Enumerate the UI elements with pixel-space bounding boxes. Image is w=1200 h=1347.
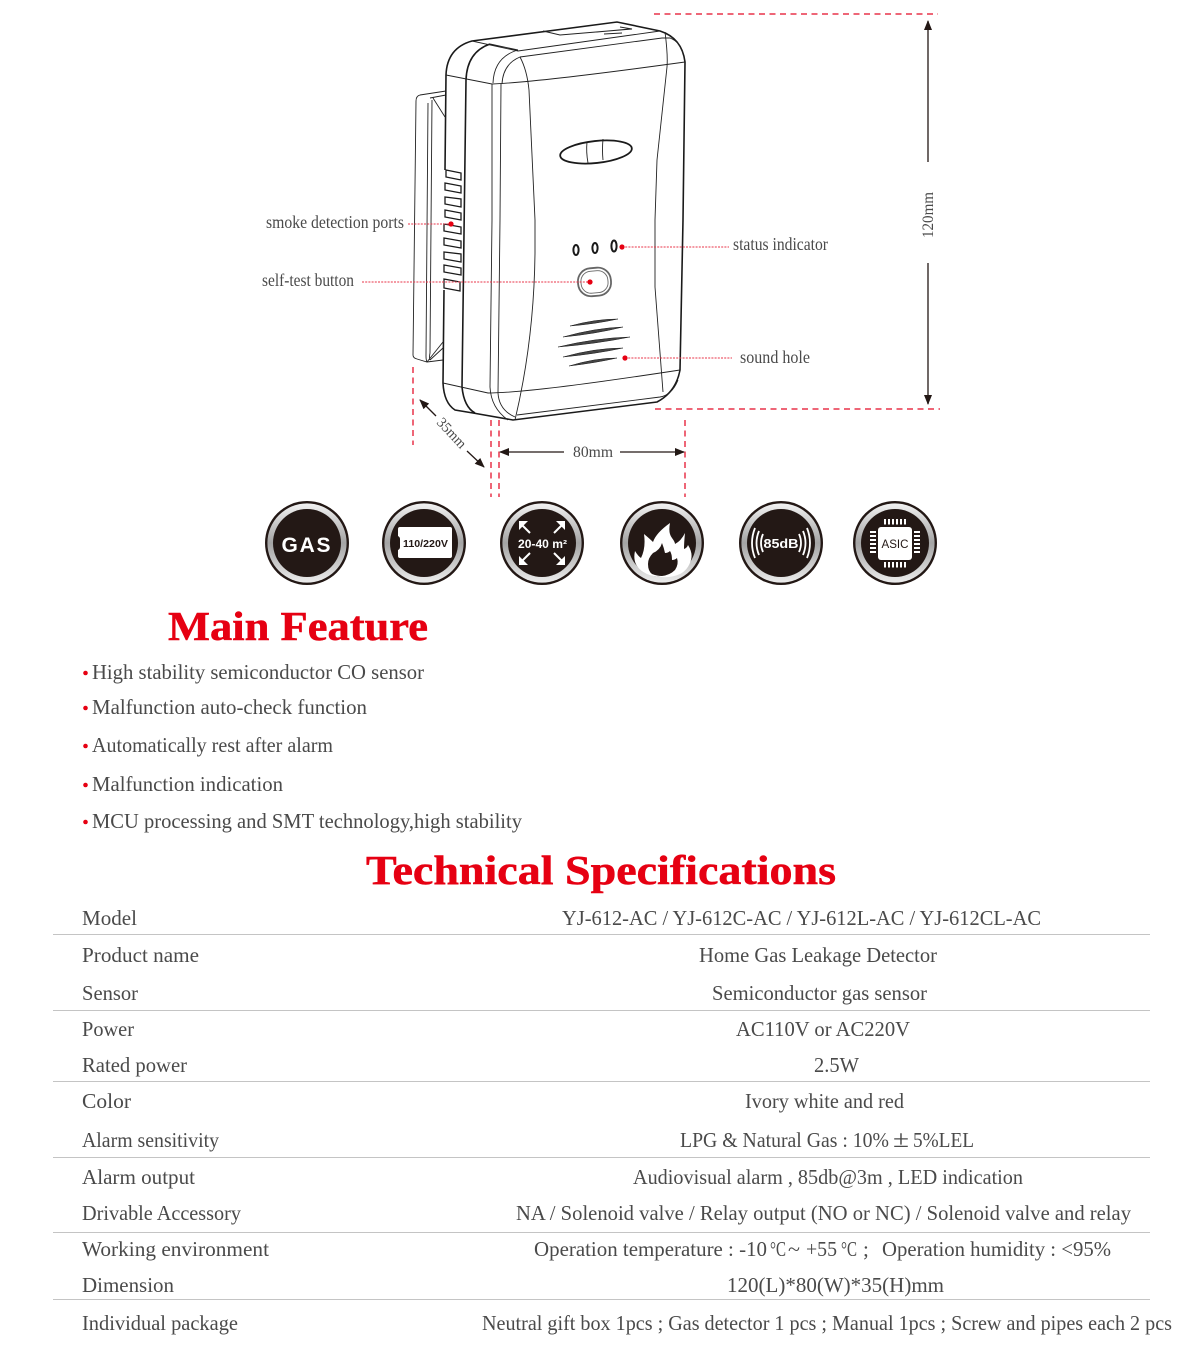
row: Product name: Product name [82,943,199,967]
icon: GAS [265,501,349,585]
row: Working environment: Operation temperature : -10 [534,1237,767,1261]
heading: Technical Specifications: Technical Specifications [366,847,836,893]
icon: 85dB alarm [739,501,823,585]
row: Drivable Accessory: Drivable Accessory [82,1201,241,1225]
icon: ASIC chip: ASIC [882,537,909,551]
self-test button [577,267,612,297]
feature 2: Malfunction auto-check function [92,695,367,719]
feature list [83,660,522,833]
row: Dimension: 120(L)*80(W)*35(H)mm [727,1273,944,1297]
row: Alarm output: Alarm output [82,1165,195,1189]
row: Rated power: Rated power [82,1053,187,1077]
row: Alarm output: Audiovisual alarm , 85db@3m , LED indication [633,1165,1023,1189]
row: Working environment: °C [770,1237,786,1261]
row: Sensor: Semiconductor gas sensor [712,981,927,1005]
icon: ASIC chip [853,501,937,585]
row: Alarm sensitivity [82,1127,974,1153]
dimension: depth 35mm: 35mm [433,415,470,453]
three status LEDs [573,240,617,255]
row: Color [82,1089,904,1113]
row: Power: Power [82,1017,134,1041]
row: Working environment: ; [863,1237,869,1261]
dimension: depth 35mm [413,367,484,467]
icon: 85dB alarm: 85dB [764,536,798,551]
feature 1: High stability semiconductor CO sensor [92,660,424,684]
row: Working environment: °C [841,1237,857,1261]
callout: sound hole: sound hole [740,347,810,367]
icon: 110/220V voltage: 110/220V [403,538,448,550]
row: Alarm sensitivity: ± [893,1127,909,1153]
row: Rated power [82,1053,859,1077]
row: Working environment [82,1237,1111,1261]
row: Product name [82,943,937,967]
callout: self-test button: self-test button [262,270,354,290]
row: Working environment: +55 [806,1237,837,1261]
row: Sensor [82,981,927,1005]
row: Power: AC110V or AC220V [736,1017,910,1041]
callout: status indicator: status indicator [733,234,828,254]
icon: GAS: GAS [282,534,330,557]
rear wall bracket [413,91,446,362]
callout: smoke detection ports: smoke detection ports [266,212,404,232]
feature 3: Automatically rest after alarm [92,733,333,757]
dimension: height 120mm: 120mm [920,191,937,238]
product line drawing [413,22,685,420]
row: Color: Ivory white and red [745,1089,904,1113]
row: Drivable Accessory: NA / Solenoid valve / Relay output (NO or NC) / Solenoid valve and relay [516,1201,1131,1225]
row: Alarm output [82,1165,1023,1189]
row: Alarm sensitivity: LPG & Natural Gas : 10% [680,1128,889,1152]
smoke detection port slats [444,170,461,291]
specifications table [53,906,1172,1335]
row: Dimension: Dimension [82,1273,174,1297]
icon: coverage 20-40 m2 [500,501,584,585]
row: Drivable Accessory [82,1201,1131,1225]
callout: self-test button [262,270,593,290]
feature 4: Malfunction indication [92,772,283,796]
detector body outline [443,22,685,420]
sound hole slots [558,319,630,366]
row: Model [82,906,1041,930]
dimension: width 80mm: 80mm [573,444,613,461]
row: Individual package [82,1311,1172,1335]
row: Rated power: 2.5W [814,1053,859,1077]
callout: status indicator [619,234,828,254]
feature 5: MCU processing and SMT technology,high stability [92,809,522,833]
row: Dimension [82,1273,944,1297]
row: Individual package: Individual package [82,1311,238,1335]
icon row [265,501,937,585]
indicator lens [559,137,633,167]
row: Alarm sensitivity: Alarm sensitivity [82,1128,219,1152]
dimension: width 80mm [491,420,685,497]
detector front face edges [462,44,490,413]
row: Working environment: ~ [788,1237,800,1261]
row: Model: YJ-612-AC / YJ-612C-AC / YJ-612L-AC / YJ-612CL-AC [562,906,1041,930]
row: Working environment: Operation humidity : <95% [882,1237,1111,1261]
callout: sound hole [622,347,810,367]
row: Model: Model [82,906,137,930]
row: Product name: Home Gas Leakage Detector [699,943,937,967]
dimension: height 120mm [654,14,940,409]
icon: flame [620,501,704,585]
row: Power [82,1017,910,1041]
row: Working environment: Working environment [82,1237,269,1261]
row: Sensor: Sensor [82,981,138,1005]
heading: Main Feature: Main Feature [168,603,428,649]
icon: 110/220V voltage [382,501,466,585]
row: Individual package: Neutral gift box 1pcs ; Gas detector 1 pcs ; Manual 1pcs ; Screw and pipes each 2 pcs [482,1311,1172,1335]
row: Color: Color [82,1089,131,1113]
icon: coverage 20-40 m2: 20-40 m² [518,539,567,551]
row: Alarm sensitivity: 5%LEL [913,1128,974,1152]
